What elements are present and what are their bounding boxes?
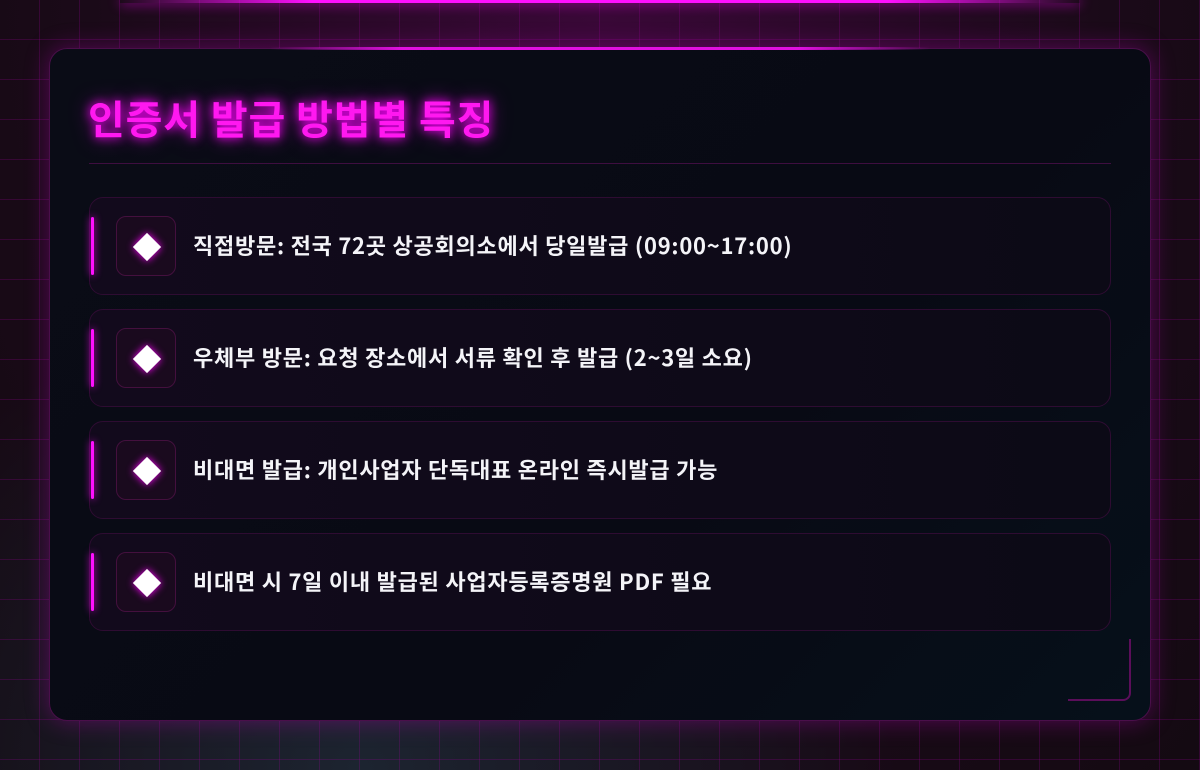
item: online requirement <box>89 533 1111 631</box>
item: postal visit <box>89 309 1111 407</box>
icon: diamond <box>116 216 176 276</box>
item: online issuance <box>89 421 1111 519</box>
text: postal visit: 우체부 방문: 요청 장소에서 서류 확인 후 발급 (2~3일 소요) <box>193 341 753 373</box>
text: online requirement: 비대면 시 7일 이내 발급된 사업자등록증명원 PDF 필요 <box>193 565 712 597</box>
text: direct visit: 직접방문: 전국 72곳 상공회의소에서 당일발급 (09:00~17:00) <box>193 229 792 261</box>
text: online issuance: 비대면 발급: 개인사업자 단독대표 온라인 즉시발급 가능 <box>193 453 718 485</box>
icon: diamond <box>116 328 176 388</box>
item: direct visit <box>89 197 1111 295</box>
icon: diamond <box>116 552 176 612</box>
icon: diamond <box>116 440 176 500</box>
title: 인증서 발급 방법별 특징 <box>88 88 494 146</box>
